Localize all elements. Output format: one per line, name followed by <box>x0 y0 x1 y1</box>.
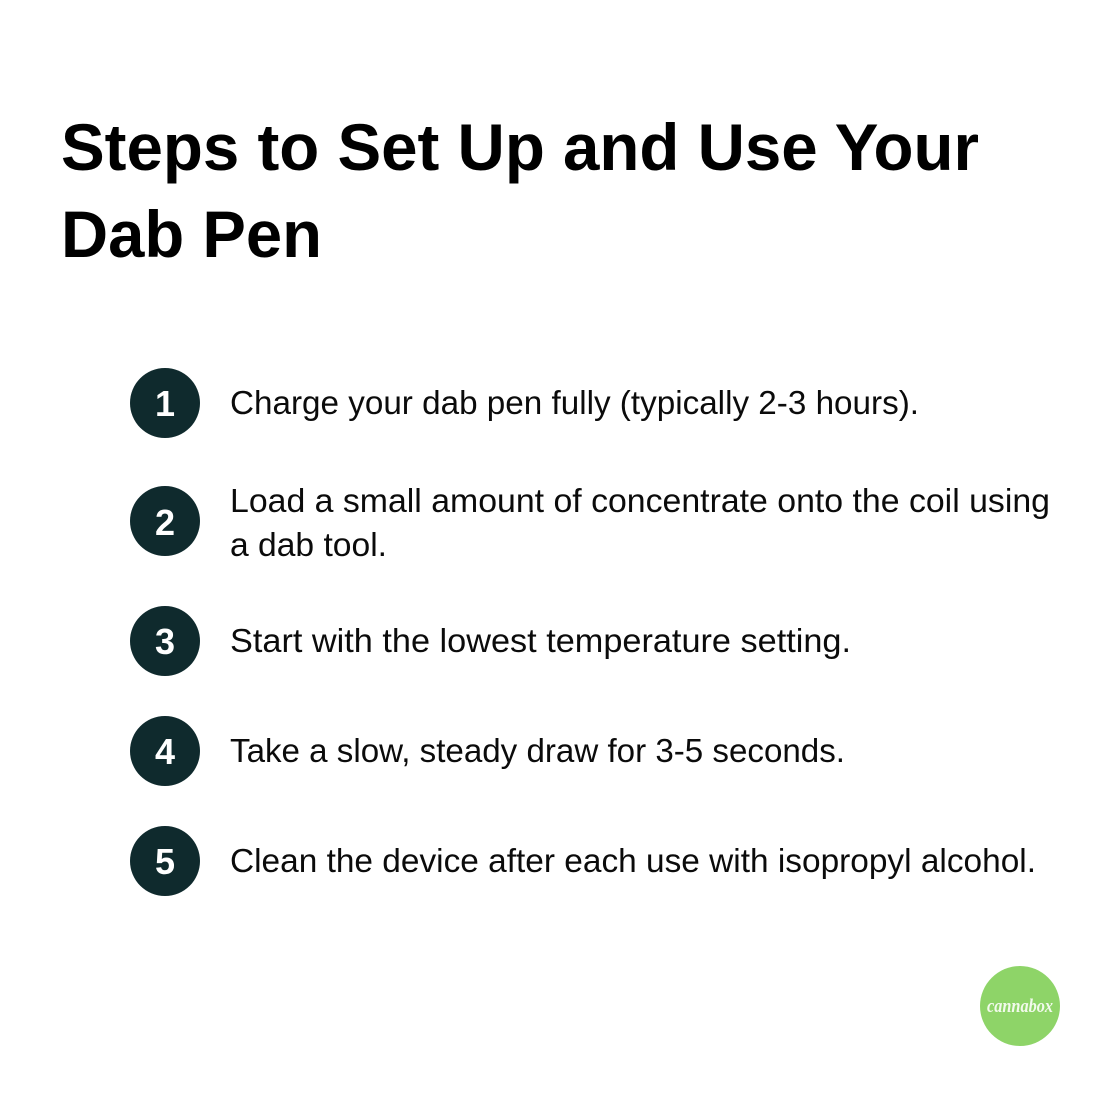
step 5 <box>130 826 1036 896</box>
step 2 text: a dab tool. <box>230 526 387 563</box>
step 2 <box>130 482 1050 563</box>
step 1 text: Charge your dab pen fully (typically 2-3 hours). <box>230 384 919 421</box>
step 2 text <box>230 482 1050 563</box>
step 2 text: Load a small amount of concentrate onto the coil using <box>230 482 1050 519</box>
step 4 number badge <box>130 716 200 786</box>
step 3 text: Start with the lowest temperature setting. <box>230 622 851 659</box>
step 5 number badge: 5 <box>155 841 175 882</box>
step 2 number badge <box>130 486 200 556</box>
step 5 text: Clean the device after each use with isopropyl alcohol. <box>230 842 1036 879</box>
cannabox logo: cannabox <box>987 996 1053 1017</box>
step 5 number badge <box>130 826 200 896</box>
step 2 number badge: 2 <box>155 502 175 543</box>
step 1 <box>130 368 919 438</box>
step 3 number badge: 3 <box>155 621 175 662</box>
title: Steps to Set Up and Use Your <box>61 110 979 184</box>
step 1 number badge <box>130 368 200 438</box>
step 4 <box>130 716 845 786</box>
step 4 number badge: 4 <box>155 731 175 772</box>
step 3 number badge <box>130 606 200 676</box>
step 4 text: Take a slow, steady draw for 3-5 seconds. <box>230 732 845 769</box>
title: Dab Pen <box>61 197 322 271</box>
step 1 number badge: 1 <box>155 383 175 424</box>
step 3 <box>130 606 851 676</box>
title <box>61 110 979 271</box>
cannabox logo <box>980 966 1060 1046</box>
